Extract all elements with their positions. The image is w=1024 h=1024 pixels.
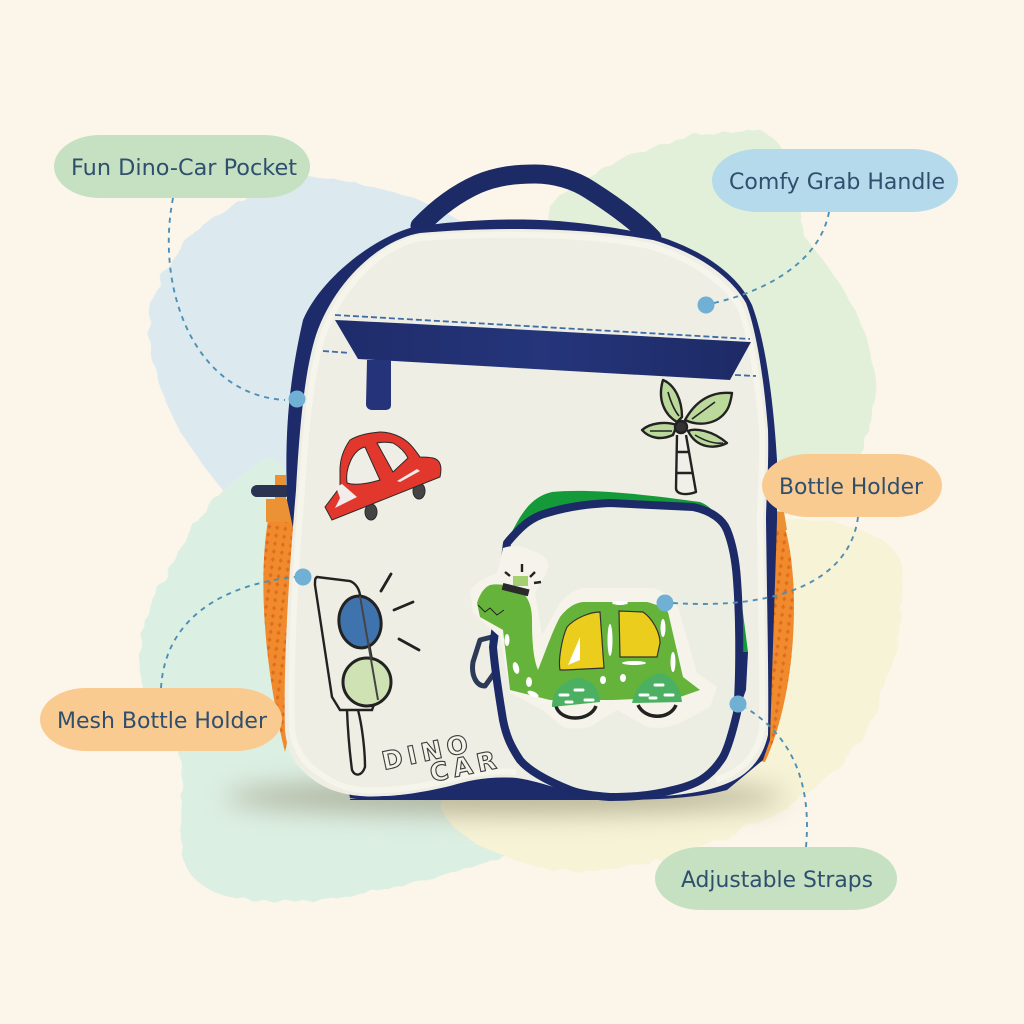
dino face xyxy=(478,605,504,615)
navy tab xyxy=(736,652,748,712)
callout: Fun Dino-Car Pocket: Fun Dino-Car Pocket xyxy=(71,155,297,181)
dino car patch xyxy=(470,546,717,728)
CAR lettering: CAR xyxy=(427,745,504,788)
callout: Comfy Grab Handle: Comfy Grab Handle xyxy=(729,169,945,195)
left mesh pocket xyxy=(263,475,296,752)
background paint blobs xyxy=(139,130,903,902)
palm tree icon xyxy=(642,380,732,494)
ground shadow xyxy=(225,780,785,814)
top stitching xyxy=(323,315,756,376)
DINO lettering: DINO xyxy=(379,728,475,776)
callout: Bottle Holder xyxy=(656,454,942,612)
navy body xyxy=(286,219,777,800)
bottom navy edge xyxy=(350,779,560,800)
white piping xyxy=(292,235,762,790)
bottle buckle xyxy=(251,485,291,497)
green zipper xyxy=(508,491,748,652)
car windows xyxy=(559,612,604,670)
pocket panel xyxy=(493,503,739,797)
arch spots xyxy=(560,685,673,702)
callout: Adjustable Straps: Adjustable Straps xyxy=(681,867,873,893)
callout: Mesh Bottle Holder xyxy=(40,568,312,751)
callout: Comfy Grab Handle xyxy=(698,149,958,314)
right mesh pocket xyxy=(755,510,794,762)
wheels xyxy=(556,705,676,718)
callout: Fun Dino-Car Pocket xyxy=(54,135,310,408)
dino body xyxy=(477,584,700,700)
backpack xyxy=(225,174,794,814)
white body spots xyxy=(504,601,676,699)
car icon xyxy=(325,432,441,520)
callout: Adjustable Straps xyxy=(655,696,897,910)
wheel arches xyxy=(552,673,682,707)
callout: Mesh Bottle Holder: Mesh Bottle Holder xyxy=(57,708,268,734)
navy zipper band xyxy=(335,320,751,380)
dino hat xyxy=(502,564,541,596)
cream front panel xyxy=(285,229,768,797)
traffic light icon xyxy=(315,574,419,775)
handle xyxy=(420,174,652,238)
callout: Bottle Holder: Bottle Holder xyxy=(779,474,924,500)
zipper pull xyxy=(366,360,391,410)
carabiner xyxy=(473,637,495,686)
patch backing xyxy=(470,546,717,728)
front pocket xyxy=(470,491,748,797)
